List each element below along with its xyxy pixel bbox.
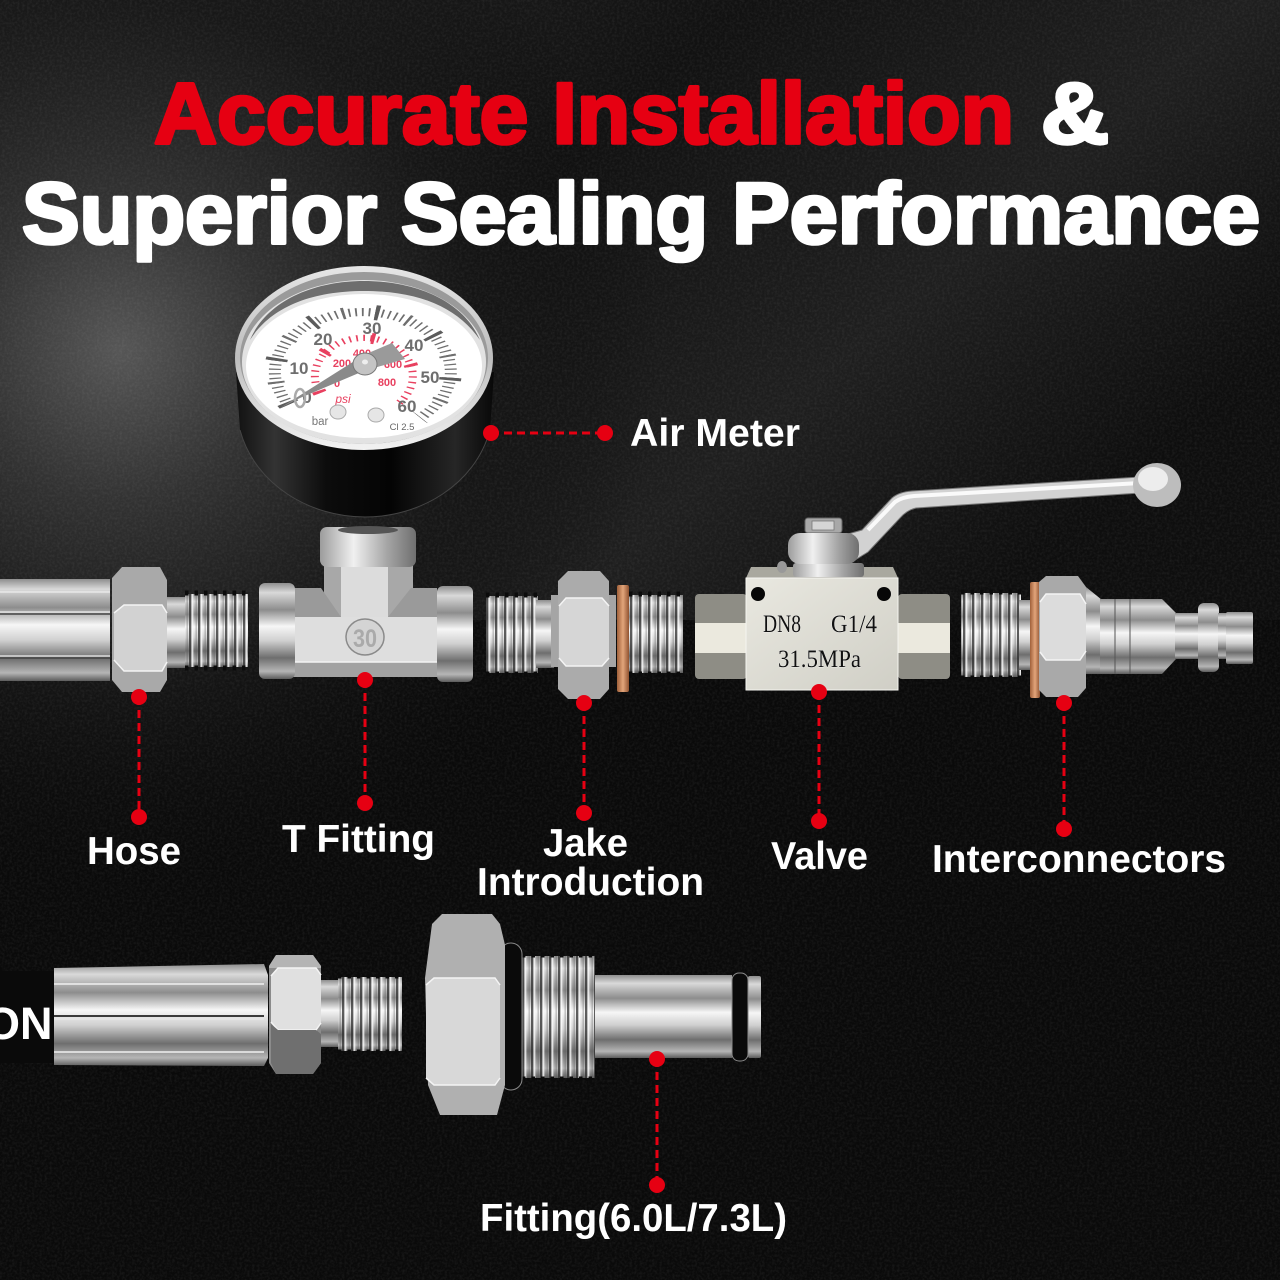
valve block [746,567,898,690]
leader: hose [131,689,147,825]
label: t fitting: T Fitting [282,818,435,861]
lower part: hose with fitting [0,955,402,1074]
leader: jake introduction [576,695,592,821]
gauge screws [330,405,384,422]
gauge numbers [290,319,439,433]
gauge numbers: 0 [302,388,312,407]
lower part: 6.0L/7.3L fitting [425,914,761,1115]
part: interconnector [961,576,1253,698]
title [22,66,1260,262]
gauge numbers: 400 [353,348,371,360]
gauge numbers: 10 [290,359,308,378]
leader: t fitting [357,672,373,811]
title: & [1041,66,1109,162]
air meter gauge [235,266,494,517]
gauge numbers: 200 [333,358,351,370]
part: top hose [0,567,248,692]
gauge psi scale [315,338,413,403]
title: Accurate Installation [154,66,1014,162]
gauge numbers: 60 [398,397,416,416]
gauge numbers: 30 [363,319,381,338]
gauge bar scale [275,312,451,417]
valve stamp [763,611,877,673]
air meter leader [483,425,613,441]
gauge numbers: psi [334,392,351,406]
gauge numbers: 800 [378,377,396,389]
o-rings [500,943,748,1090]
gauge numbers: bar [312,416,328,428]
valve handle [848,477,1140,560]
gauge numbers: 20 [314,330,332,349]
part: jake introduction [486,571,683,699]
leader: fitting [649,1051,665,1193]
gauge numbers: Cl 2.5 [390,422,414,433]
gauge numbers: 40 [405,336,423,355]
title: Superior Sealing Performance [22,166,1260,262]
label: jake introduction: Introduction [477,861,704,904]
gauge needle [280,343,405,408]
part: t fitting: 30 [353,625,377,653]
gauge numbers: 600 [384,359,402,371]
part: t fitting [259,526,473,682]
label: air meter: Air Meter [630,412,800,455]
leader: interconnectors [1056,695,1072,837]
valve stamp: DN8 [763,611,801,638]
part: ball valve [695,463,1181,690]
label: interconnectors: Interconnectors [932,838,1226,881]
label: hose: Hose [87,830,181,873]
valve stamp: G1/4 [831,611,877,638]
gauge numbers: 0 [334,378,340,390]
gauge numbers: 50 [421,368,439,387]
label: jake introduction: Jake [543,822,628,865]
label: fitting: Fitting(6.0L/7.3L) [480,1197,787,1240]
valve stem [777,518,864,577]
valve stamp: 31.5MPa [778,646,861,673]
label: valve: Valve [771,835,868,878]
valve end hexes [695,594,950,679]
leader: valve [811,684,827,829]
label: jake introduction [477,822,704,904]
